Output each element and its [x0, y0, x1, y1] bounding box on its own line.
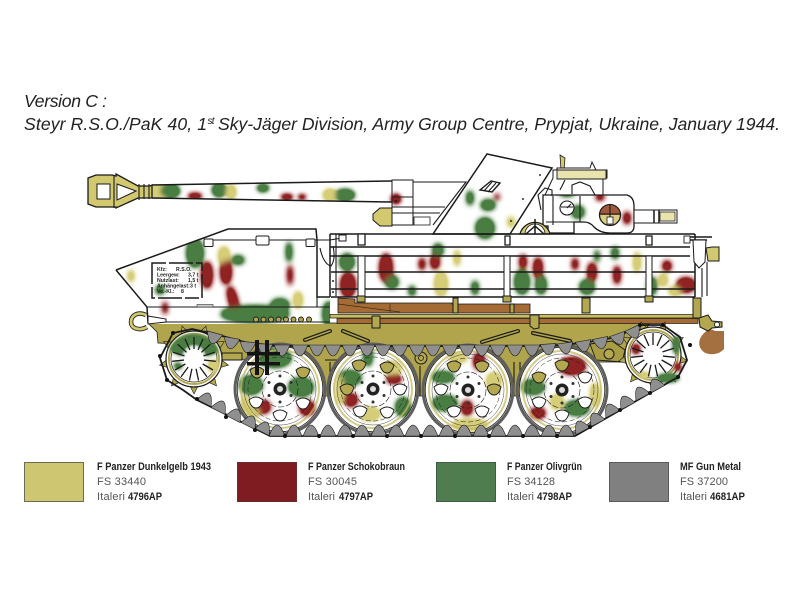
stencil data panel: 3 t [190, 284, 196, 290]
legend: Olivgrün: FS 34128 [507, 476, 555, 488]
legend: Dunkelgelb: F Panzer Dunkelgelb 1943 [97, 461, 211, 473]
title: st [208, 116, 216, 127]
road wheel 4 [517, 345, 607, 435]
swatch: gun metal grey [610, 462, 668, 502]
camouflage on body [128, 183, 695, 326]
legend: Dunkelgelb: FS 33440 [97, 476, 146, 488]
rear sprocket [618, 321, 688, 390]
rivet row [254, 317, 312, 322]
rear tow bracket and brown hose [699, 315, 724, 354]
legend: Gun Metal: MF Gun Metal [680, 461, 741, 473]
stencil data panel: Leergew: [157, 272, 180, 278]
legend: Schokobraun: FS 30045 [308, 476, 357, 488]
legend: Dunkelgelb [24, 461, 211, 503]
cab panel outline [116, 229, 330, 323]
title: Version C : [24, 91, 107, 111]
hull diagonal bars [305, 331, 570, 342]
track link dots [158, 323, 692, 438]
legend: Olivgrün: F Panzer Olivgrün [507, 461, 582, 473]
title: Steyr R.S.O./PaK 40, 1 [24, 114, 207, 134]
recoil cylinder head [373, 180, 466, 226]
wooden planks [330, 298, 698, 324]
track pads top run [204, 325, 644, 356]
front sprocket [159, 325, 229, 394]
stencil data panel [152, 263, 202, 298]
gun carriage and breech [538, 155, 677, 233]
legend: Olivgrün [436, 461, 582, 503]
cab hinges [204, 236, 315, 246]
track pads angled rear [571, 376, 665, 435]
vehicle side view [88, 154, 724, 438]
track pads bottom run [269, 425, 574, 436]
title [24, 91, 780, 134]
cargo bed rails [330, 234, 695, 297]
cargo bed posts [357, 234, 701, 329]
legend: Schokobraun: 4797AP [339, 491, 373, 503]
legend: Olivgrün: 4798AP [537, 491, 572, 503]
legend: Gun Metal: Italeri [680, 491, 707, 503]
title: Sky-Jäger Division, Army Group Centre, Prypjat, Ukraine, January 1944. [218, 114, 780, 134]
stencil data panel: 3,7 t [188, 272, 199, 278]
gun barrel outline [152, 181, 392, 202]
stencil data panel: R.S.O. [176, 267, 192, 273]
lower hull [148, 323, 650, 396]
handwheel [520, 219, 550, 234]
stencil data panel: Kfz: [157, 267, 167, 273]
upper body base [116, 154, 695, 324]
legend: Dunkelgelb: 4796AP [128, 491, 162, 503]
gun shield [433, 154, 552, 234]
rear bed fittings [684, 236, 719, 297]
suspension details [222, 341, 625, 396]
track pads angled front [197, 390, 274, 436]
stencil data panel: 1,5 t [188, 278, 199, 284]
track chain [160, 325, 687, 436]
legend: Schokobraun [238, 461, 405, 503]
legend: Gun Metal [610, 461, 745, 503]
road wheel 2 [328, 344, 418, 434]
legend: Olivgrün: Italeri [507, 491, 534, 503]
towing hook front [131, 314, 166, 329]
legend: Gun Metal: FS 37200 [680, 476, 728, 488]
gun muzzle brake [88, 174, 152, 208]
stencil data panel: Nutzlast: [157, 278, 179, 284]
stencil data panel: Ve.-Kl.: [157, 289, 175, 295]
front bed latch and chain [317, 235, 346, 266]
swatch: olive green [436, 462, 496, 502]
legend: Gun Metal: 4681AP [710, 491, 745, 503]
legend: Schokobraun: F Panzer Schokobraun [308, 461, 405, 473]
swatch: chocolate brown [238, 462, 296, 502]
legend: Schokobraun: Italeri [308, 491, 335, 503]
road wheel 1 [235, 344, 325, 434]
stencil data panel: 8 [181, 289, 184, 295]
swatch: dark yellow [24, 462, 84, 502]
stencil data panel: Anhängelast: [157, 284, 190, 290]
road wheel 3 [423, 345, 513, 435]
legend: Dunkelgelb: Italeri [97, 491, 125, 503]
balkenkreuz marking [247, 340, 280, 375]
